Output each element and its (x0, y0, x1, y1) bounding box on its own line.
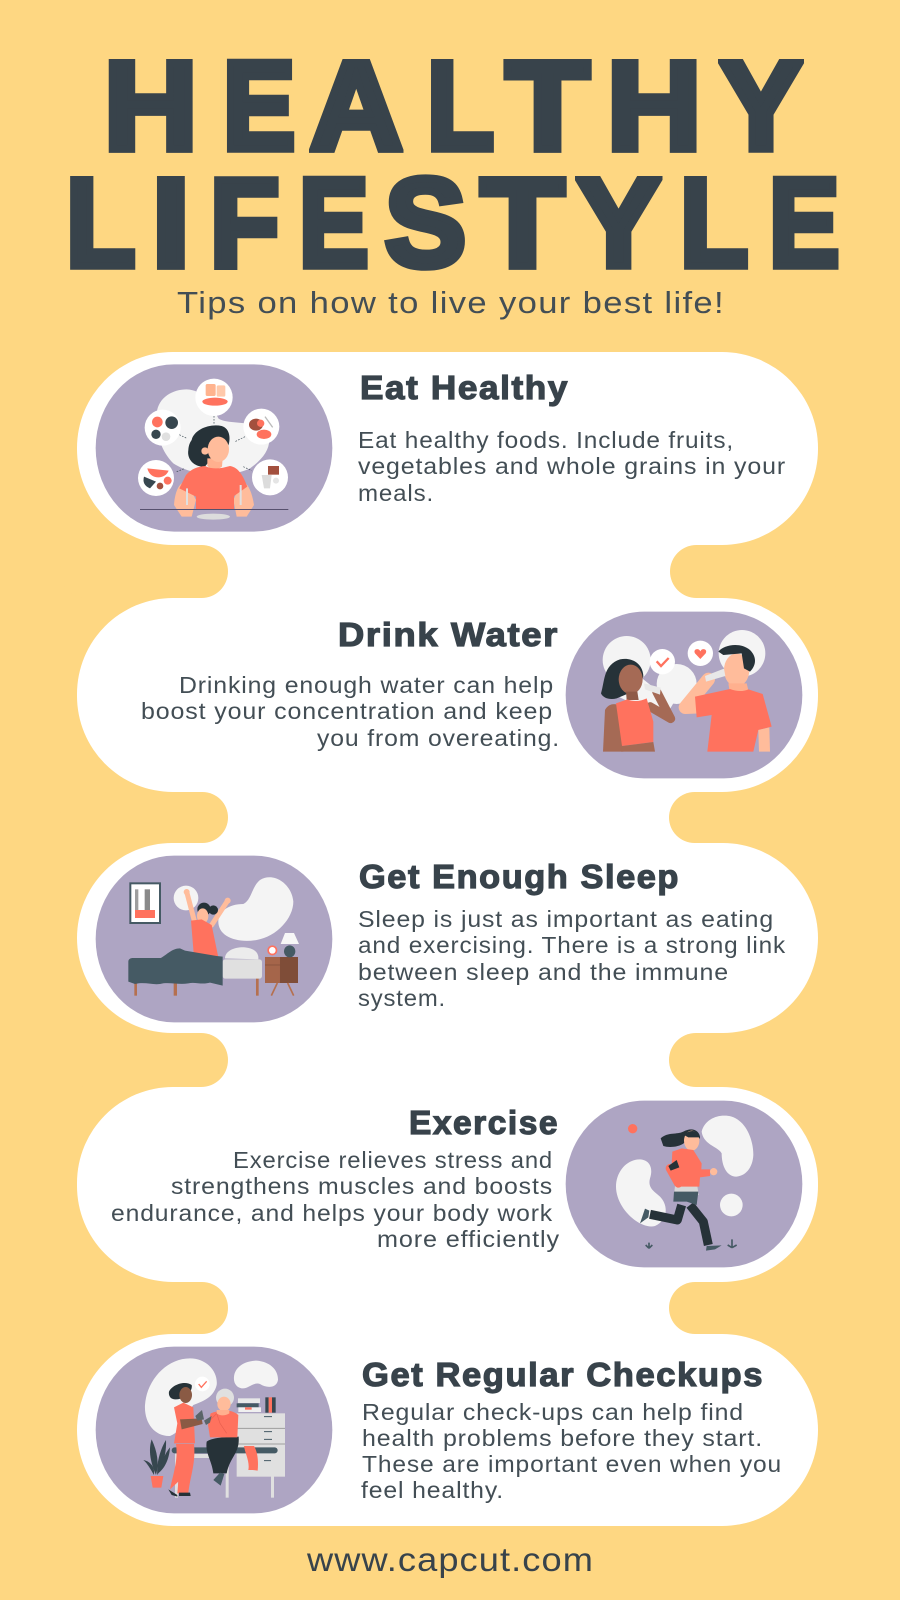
subtitle: Tips on how to live your best life! (177, 285, 725, 320)
title: H (607, 36, 701, 176)
title: I (152, 153, 189, 293)
illustration: woman waking up in bed (96, 856, 332, 1022)
heading: Exercise (409, 1104, 559, 1141)
description (361, 1399, 782, 1503)
description: vegetables and whole grains in your (358, 453, 786, 479)
description: These are important even when you (362, 1451, 782, 1477)
description (358, 906, 786, 1011)
title: L (66, 153, 136, 293)
title: E (299, 153, 368, 293)
description: between sleep and the immune (358, 959, 729, 985)
description: feel healthy. (361, 1477, 504, 1503)
description: Regular check-ups can help find (362, 1399, 744, 1425)
heading: Eat Healthy (360, 369, 569, 406)
title: Y (577, 153, 660, 293)
illustration: woman running (566, 1101, 802, 1267)
heading: Get Regular Checkups (362, 1356, 764, 1393)
description: Eat healthy foods. Include fruits, (358, 427, 734, 453)
panel: Eat Healthy (96, 364, 786, 532)
description: system. (358, 985, 446, 1011)
description: Drinking enough water can help (179, 672, 554, 698)
title: L (680, 153, 748, 293)
description: more efficiently (377, 1226, 560, 1252)
heading: Drink Water (338, 616, 559, 653)
title: S (385, 153, 466, 293)
description (141, 672, 560, 751)
panel: Get Enough Sleep (96, 856, 786, 1022)
title: L (426, 36, 493, 176)
panel: Get Regular Checkups (96, 1347, 782, 1513)
title: H (104, 36, 197, 176)
title: T (506, 36, 589, 176)
description: and exercising. There is a strong link (358, 932, 786, 958)
heading: Get Enough Sleep (359, 858, 680, 895)
panel: Exercise (111, 1101, 802, 1267)
white wavy background shape (60, 352, 840, 1526)
illustration: two people drinking water (566, 612, 802, 778)
title: T (481, 153, 564, 293)
illustration: person eating surrounded by food (96, 364, 332, 532)
description: health problems before they start. (362, 1425, 763, 1451)
title: E (769, 153, 839, 293)
description: Sleep is just as important as eating (358, 906, 774, 932)
description: boost your concentration and keep (141, 698, 553, 724)
title (66, 36, 839, 293)
description (111, 1147, 560, 1252)
description: you from overeating. (317, 725, 560, 751)
description: meals. (358, 480, 434, 506)
panel: Drink Water (141, 612, 802, 778)
title: E (223, 36, 295, 176)
description: endurance, and helps your body work (111, 1200, 553, 1226)
footer URL: www.capcut.com (306, 1541, 594, 1578)
title: F (210, 153, 280, 293)
description: strengthens muscles and boosts (171, 1173, 553, 1199)
title: Y (720, 36, 802, 176)
description: Exercise relieves stress and (233, 1147, 553, 1173)
title: A (310, 36, 402, 176)
illustration: nurse checking a patient (96, 1347, 332, 1513)
description (358, 427, 786, 506)
